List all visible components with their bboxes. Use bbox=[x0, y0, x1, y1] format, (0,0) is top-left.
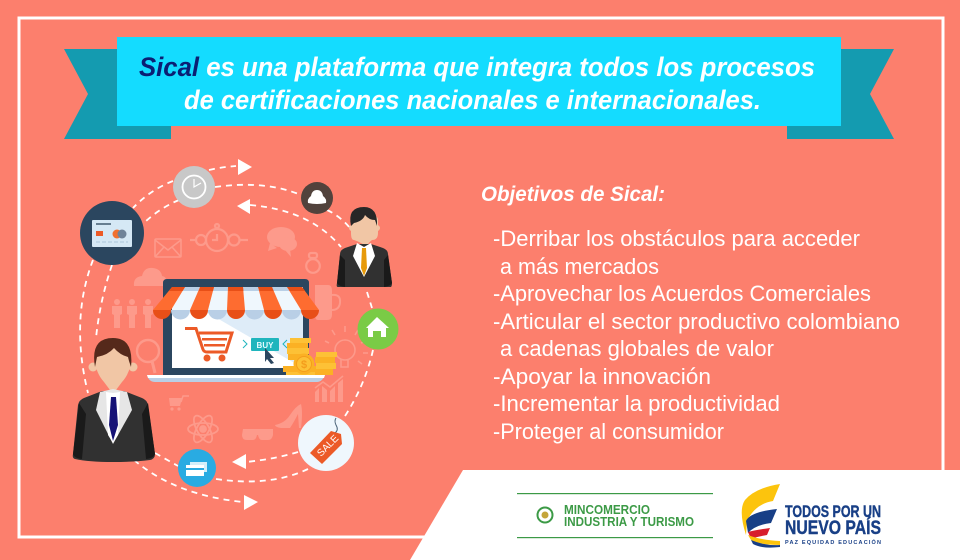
todos por un nuevo pais logo: TODOS POR UN bbox=[785, 503, 881, 521]
title text: Sical es una plataforma que integra todos los procesos bbox=[139, 52, 815, 82]
objectives list: a más mercados bbox=[500, 254, 659, 279]
person: man with navy tie bbox=[73, 338, 155, 462]
icon: cloud bbox=[134, 268, 167, 286]
icon: bell bbox=[301, 182, 333, 214]
dashed arrows bbox=[80, 166, 373, 502]
icon: atom bbox=[188, 413, 218, 445]
title text: de certificaciones nacionales e internacionales. bbox=[184, 85, 761, 115]
todos por un nuevo pais logo bbox=[742, 484, 881, 548]
icon: blue cards bbox=[178, 449, 216, 487]
icon: house bbox=[358, 308, 398, 350]
todos por un nuevo pais logo: PAZ EQUIDAD EDUCACIÓN bbox=[785, 538, 881, 546]
icon: sale tag bbox=[298, 415, 354, 471]
icon: chat bubbles bbox=[267, 227, 297, 257]
icon: clock bbox=[173, 166, 215, 208]
icon: ring bbox=[306, 253, 320, 273]
icon: credit card bbox=[80, 201, 144, 265]
title ribbon bbox=[64, 37, 894, 139]
objectives heading: Objetivos de Sical: bbox=[481, 183, 665, 206]
logo panel bbox=[410, 470, 960, 560]
arrowheads bbox=[232, 159, 258, 510]
objectives list: -Aprovechar los Acuerdos Comerciales bbox=[493, 281, 871, 306]
objectives list: -Proteger al consumidor bbox=[493, 419, 724, 444]
icon: light bulb bbox=[325, 326, 368, 367]
person: man with orange tie bbox=[337, 207, 392, 287]
objectives list: -Apoyar la innovación bbox=[493, 364, 711, 389]
icon: envelope bbox=[155, 239, 181, 257]
coins bbox=[283, 338, 337, 375]
objectives list: -Incrementar la productividad bbox=[493, 391, 780, 416]
icon: growth chart bbox=[315, 376, 343, 402]
icon: gear watch bbox=[190, 224, 248, 251]
icon: magnifier bbox=[137, 340, 159, 373]
mincomercio logo: MINCOMERCIO bbox=[564, 503, 650, 517]
mincomercio logo bbox=[517, 493, 713, 538]
icon: people bbox=[112, 299, 153, 328]
mincomercio logo: INDUSTRIA Y TURISMO bbox=[564, 515, 694, 529]
objectives list: -Articular el sector productivo colombiano bbox=[493, 309, 900, 334]
laptop body bbox=[163, 279, 309, 375]
icon: mug bbox=[315, 285, 340, 320]
title text bbox=[139, 52, 815, 115]
icon: glasses bbox=[242, 429, 273, 440]
objectives list: a cadenas globales de valor bbox=[500, 336, 774, 361]
objectives list: -Derribar los obstáculos para acceder bbox=[493, 226, 860, 251]
icon: shopping cart bbox=[185, 328, 232, 362]
background faint icons bbox=[112, 224, 368, 445]
laptop store bbox=[147, 279, 337, 382]
icon: sale tag: SALE bbox=[315, 433, 341, 459]
objectives list bbox=[493, 226, 900, 444]
buy button bbox=[243, 338, 287, 364]
icon: small cart bbox=[169, 396, 189, 411]
buy button: BUY bbox=[257, 341, 274, 350]
awning bbox=[153, 287, 319, 320]
todos por un nuevo pais logo: NUEVO PAÍS bbox=[785, 516, 881, 539]
coins: $ bbox=[301, 359, 307, 371]
icon: high heel bbox=[275, 404, 302, 428]
